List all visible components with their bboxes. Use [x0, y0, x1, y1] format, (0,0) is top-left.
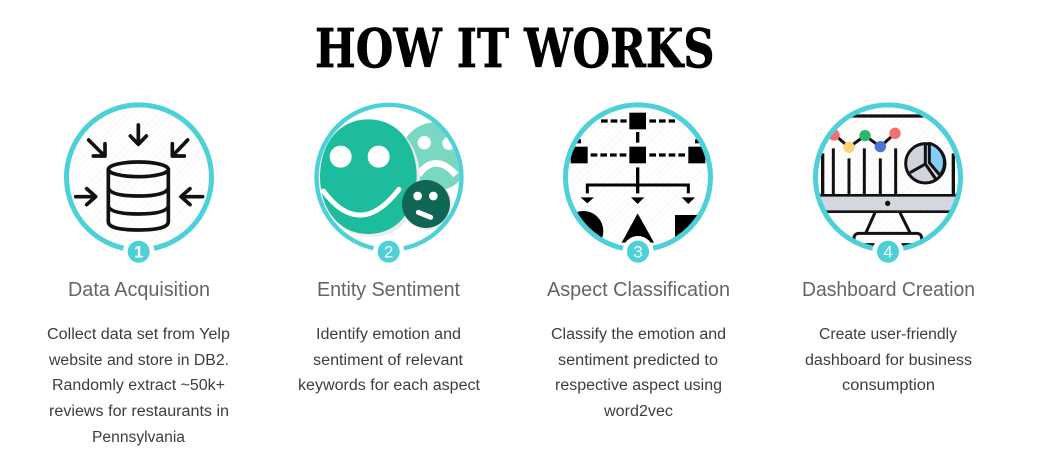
icon: monitor with charts [815, 105, 960, 267]
description: Create user-friendly [819, 326, 957, 343]
panel: aspect classification [547, 105, 730, 420]
panel: dashboard creation [802, 105, 975, 394]
description: Collect data set from Yelp [47, 326, 230, 343]
description: sentiment predicted to [558, 352, 718, 369]
title: HOW IT WORKS [315, 19, 715, 80]
description [298, 326, 481, 394]
heading: Data Acquisition [68, 279, 210, 301]
description: respective aspect using [555, 377, 722, 394]
heading: Dashboard Creation [802, 279, 975, 301]
description: Classify the emotion and [551, 326, 726, 343]
icon: classification tree: 3 [633, 243, 643, 262]
description: reviews for restaurants in [49, 403, 229, 420]
description [551, 326, 726, 420]
icon: emotion faces: 2 [384, 243, 393, 262]
description: dashboard for business [805, 352, 972, 369]
icon: emotion faces [316, 105, 469, 267]
description [805, 326, 972, 394]
heading: Aspect Classification [547, 279, 730, 301]
panel: data acquisition [47, 105, 230, 446]
description: word2vec [603, 403, 673, 420]
description: consumption [842, 377, 935, 394]
heading: Entity Sentiment [317, 279, 460, 301]
description: keywords for each aspect [298, 377, 481, 394]
description: sentiment of relevant [313, 352, 464, 369]
description [47, 326, 230, 446]
icon: monitor with charts: 4 [883, 243, 893, 262]
icon: classification tree [563, 105, 710, 267]
description: website and store in DB2. [48, 352, 229, 369]
icon: database with incoming arrows: 1 [134, 243, 143, 262]
panel: entity sentiment [298, 105, 481, 394]
description: Identify emotion and [316, 326, 461, 343]
description: Randomly extract ~50k+ [52, 377, 225, 394]
icon: database with incoming arrows [66, 105, 211, 267]
description: Pennsylvania [92, 429, 185, 446]
